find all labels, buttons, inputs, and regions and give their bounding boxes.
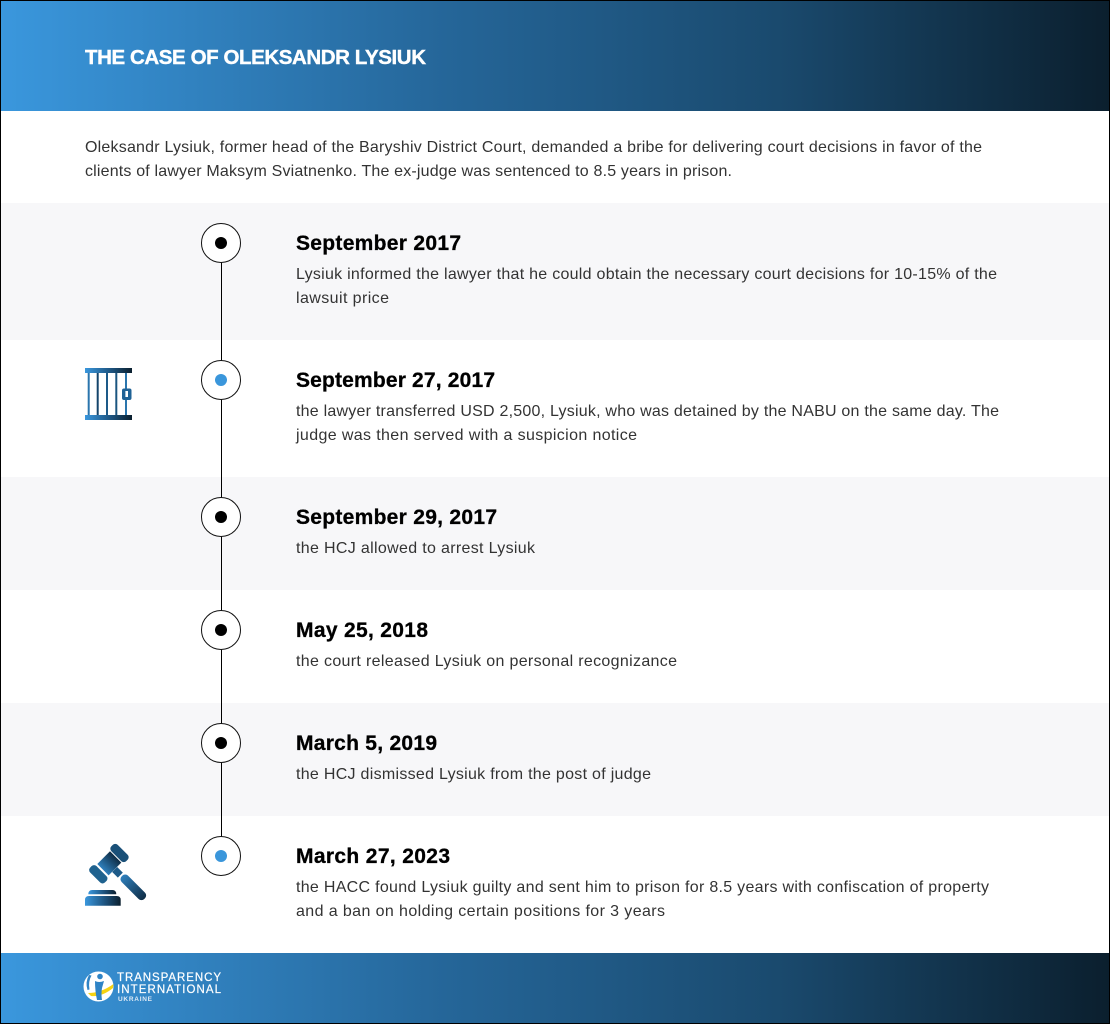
event: March 27, 2023: March 27, 2023 xyxy=(296,845,450,868)
logo: Transparency International Ukraine: TRANSPARENCY xyxy=(117,972,221,984)
title: THE CASE OF OLEKSANDR LYSIUK xyxy=(85,46,426,69)
event: March 27, 2023: and a ban on holding certain positions for 3 years xyxy=(296,903,665,920)
event: May 25, 2018: May 25, 2018 xyxy=(296,619,428,642)
logo: Transparency International Ukraine: UKRAINE xyxy=(118,996,153,1003)
timeline marker: March 27, 2023 xyxy=(202,836,240,876)
event: March 5, 2019: March 5, 2019 xyxy=(296,732,437,755)
event: September 27, 2017: judge was then served with a suspicion notice xyxy=(295,427,637,444)
timeline marker: September 2017 xyxy=(202,224,240,262)
icon: gavel xyxy=(85,842,148,906)
event: September 2017 xyxy=(296,232,997,307)
icon: prison bars xyxy=(85,368,132,420)
timeline marker: September 29, 2017 xyxy=(202,498,240,536)
event: September 2017: lawsuit price xyxy=(296,290,389,307)
event: September 27, 2017: September 27, 2017 xyxy=(296,369,495,392)
logo: Transparency International Ukraine xyxy=(84,972,222,1003)
event: March 27, 2023 xyxy=(296,845,989,920)
event: May 25, 2018 xyxy=(296,619,677,670)
intro text: Oleksandr Lysiuk, former head of the Baryshiv District Court, demanded a bribe for delivering court decisions in favor of the xyxy=(85,139,982,156)
timeline marker: March 5, 2019 xyxy=(202,724,240,762)
header band xyxy=(1,1,1109,111)
intro text: clients of lawyer Maksym Sviatnenko. The ex-judge was sentenced to 8.5 years in prison. xyxy=(85,163,732,180)
event: September 2017: September 2017 xyxy=(296,232,461,255)
timeline marker: May 25, 2018 xyxy=(202,610,240,650)
event: September 2017: Lysiuk informed the lawyer that he could obtain the necessary court decisions for 10-15% of the xyxy=(296,266,997,283)
event: March 27, 2023: the HACC found Lysiuk guilty and sent him to prison for 8.5 years with confiscation of property xyxy=(296,879,989,896)
event: September 29, 2017: the HCJ allowed to arrest Lysiuk xyxy=(296,540,536,557)
row backgrounds xyxy=(1,203,1109,816)
intro text xyxy=(85,139,982,180)
event: September 27, 2017 xyxy=(295,369,999,444)
logo: Transparency International Ukraine: INTERNATIONAL xyxy=(117,984,222,996)
timeline line xyxy=(221,243,222,856)
footer band xyxy=(1,953,1109,1023)
event: March 5, 2019 xyxy=(296,732,651,783)
event: September 27, 2017: the lawyer transferred USD 2,500, Lysiuk, who was detained by the NABU on the same day. The xyxy=(296,403,999,420)
event: September 29, 2017: September 29, 2017 xyxy=(296,506,497,529)
event: May 25, 2018: the court released Lysiuk on personal recognizance xyxy=(296,653,677,670)
timeline marker: September 27, 2017 xyxy=(202,360,240,400)
event: March 5, 2019: the HCJ dismissed Lysiuk from the post of judge xyxy=(296,766,651,783)
event: September 29, 2017 xyxy=(296,506,536,557)
